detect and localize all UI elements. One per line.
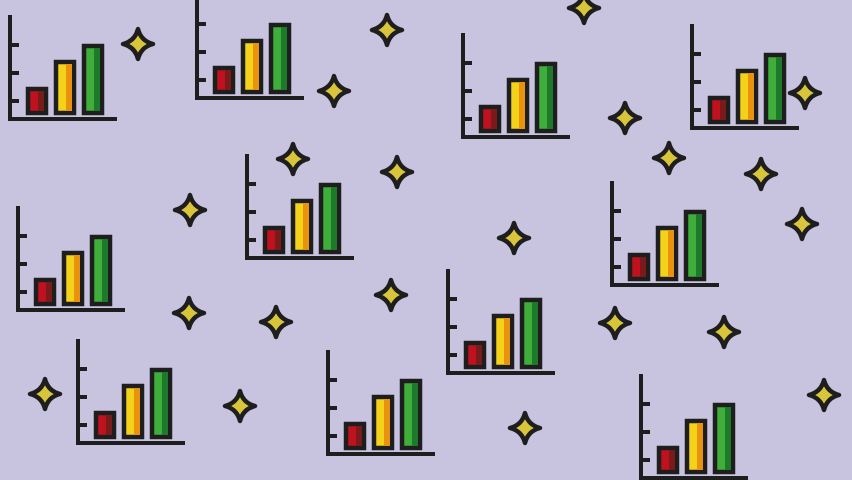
chart icon 5 (245, 154, 354, 260)
chart icon 6 (16, 206, 125, 312)
chart icon 9 (76, 339, 185, 445)
chart icon 10 (326, 350, 435, 456)
chart icon 2 (195, 0, 304, 100)
chart icon 8 (446, 269, 555, 375)
chart icon 1 (8, 15, 117, 121)
chart icon 11 (639, 374, 748, 480)
chart icon 3 (461, 33, 570, 139)
chart icon 4 (690, 24, 799, 130)
chart icon 7 (610, 181, 719, 287)
